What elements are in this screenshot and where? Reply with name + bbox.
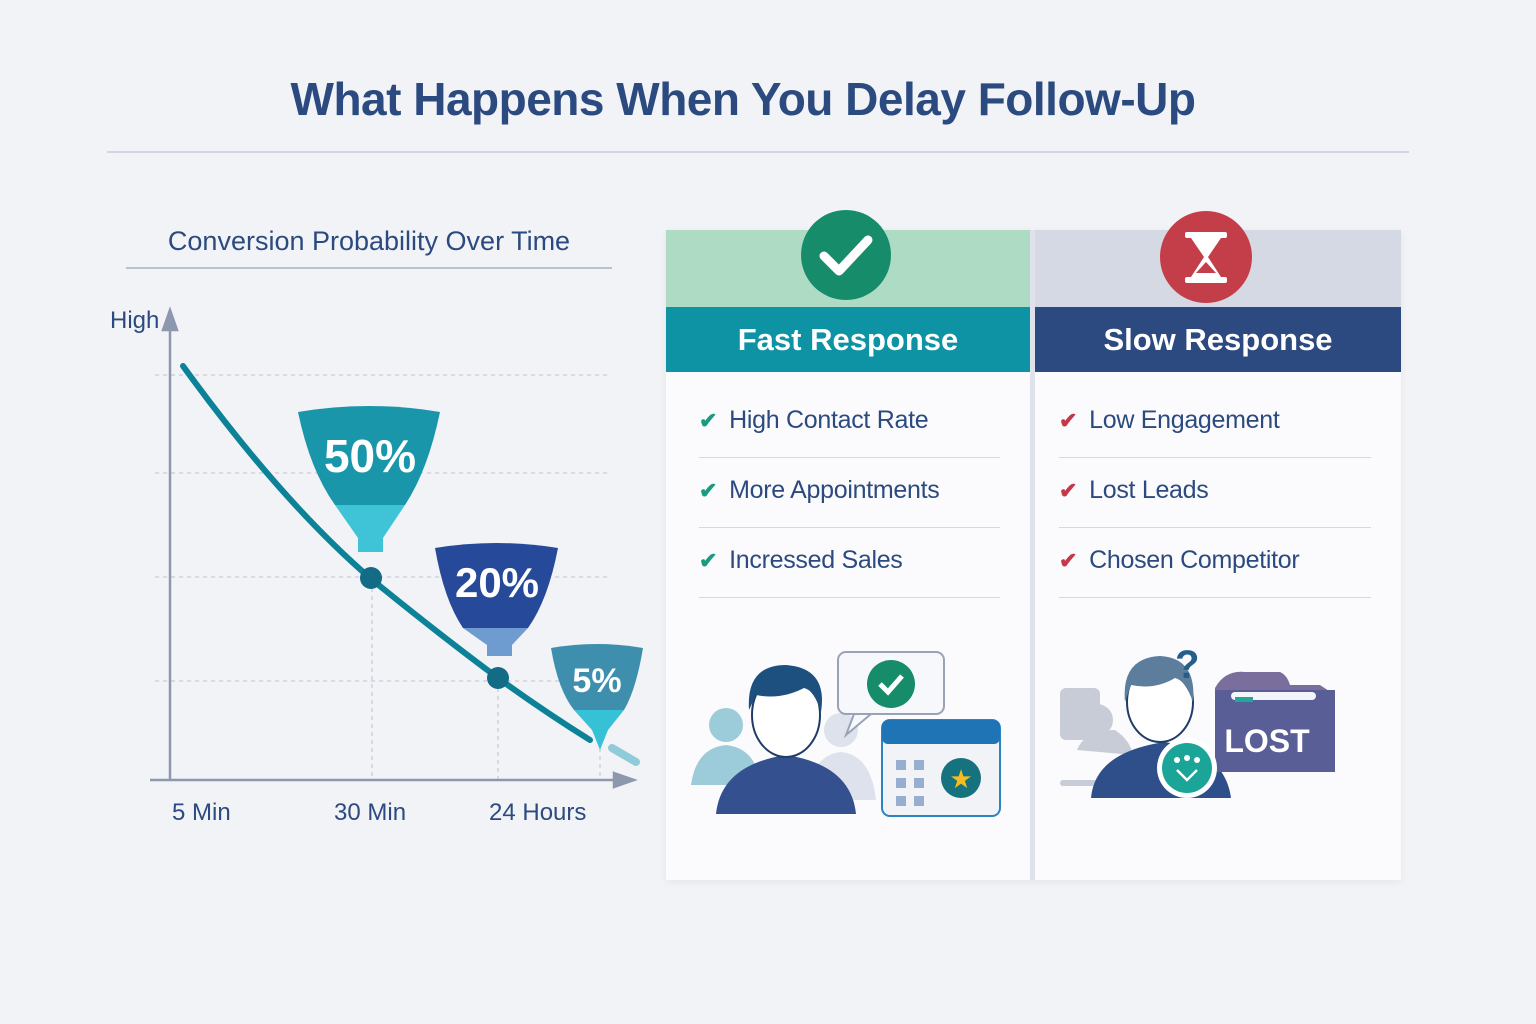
chart subtitle (126, 226, 612, 269)
panel: slow response (1035, 211, 1401, 798)
panel: fast response: ✔ High Contact Rate (699, 406, 928, 434)
illustration: lost lead: ? (1175, 643, 1199, 687)
line chart (110, 306, 643, 826)
heading: slow response: Slow Response (1103, 322, 1333, 357)
funnel 50%: 50% (324, 430, 416, 482)
illustration: lost lead: LOST (1224, 723, 1310, 759)
icon: check (801, 210, 891, 300)
funnel 50% (298, 406, 440, 552)
axis labels (110, 307, 586, 826)
funnel 20% (435, 543, 558, 656)
chart subtitle: Conversion Probability Over Time (168, 226, 570, 256)
panel: slow response: ✔ Lost Leads (1059, 476, 1208, 504)
illustration: happy contact with calendar: ★ (949, 764, 973, 794)
heading: fast response: Fast Response (738, 322, 958, 357)
curve (183, 366, 636, 762)
icon: hourglass (1160, 211, 1252, 303)
panel: slow response: ✔ Low Engagement (1059, 406, 1280, 434)
panel: fast response: ✔ More Appointments (699, 476, 939, 504)
axis labels: 24 Hours (489, 799, 586, 826)
axis labels: High (110, 307, 159, 334)
funnel 5% (551, 644, 643, 750)
illustration: lost lead (1060, 643, 1335, 798)
funnel 5%: 5% (572, 662, 622, 700)
axes (150, 310, 634, 787)
illustration: happy contact with calendar (691, 651, 1001, 817)
axis labels: 5 Min (172, 799, 231, 826)
panel: fast response: ✔ Incressed Sales (699, 546, 903, 574)
heading: fast response (666, 307, 1030, 372)
panel: fast response (666, 210, 1030, 817)
panel: slow response: ✔ Chosen Competitor (1059, 546, 1299, 574)
comparison card (666, 230, 1401, 880)
list: fast benefits (699, 406, 1000, 598)
axis labels: 30 Min (334, 799, 406, 826)
title: What Happens When You Delay Follow-Up (291, 73, 1195, 125)
list: slow consequences (1059, 406, 1371, 598)
funnel 20%: 20% (455, 559, 539, 606)
heading: slow response (1035, 307, 1401, 372)
